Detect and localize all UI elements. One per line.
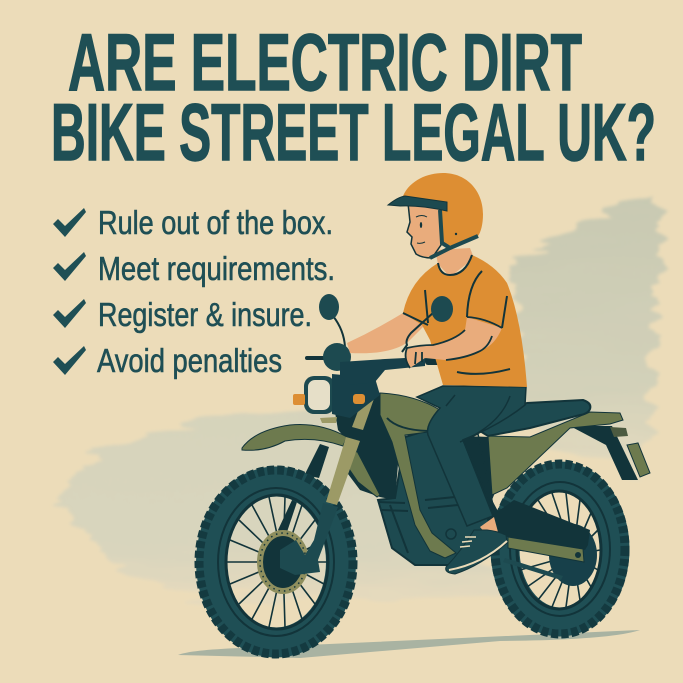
- right mirror: [402, 296, 453, 352]
- front fork lower leg: [280, 503, 338, 575]
- brush wash: upper right: [515, 195, 660, 470]
- check item 3: [53, 296, 312, 333]
- t-shirt: [403, 255, 527, 387]
- check item 4: [53, 342, 282, 379]
- title: [51, 18, 656, 178]
- under-seat shadow: [462, 436, 520, 525]
- ankle: [480, 517, 498, 533]
- handlebar: [305, 343, 446, 385]
- rider: [347, 173, 527, 574]
- front fender: [242, 424, 380, 497]
- check item 2: Meet requirements.: [98, 250, 335, 287]
- trousers: [417, 386, 526, 526]
- engine and battery block: [378, 430, 492, 565]
- helmet: [388, 173, 483, 258]
- check item 4: Avoid penalties: [97, 342, 282, 379]
- left mirror: [319, 294, 345, 347]
- front wheel: [199, 470, 353, 654]
- olive frame and tank: [380, 393, 456, 558]
- head: [407, 203, 441, 258]
- fork upper tubes: [326, 390, 376, 505]
- swingarm: [493, 500, 590, 580]
- rear wheel: [495, 464, 625, 634]
- shoe: [446, 530, 507, 574]
- brake disc: [260, 533, 306, 591]
- check item 1: Rule out of the box.: [98, 204, 333, 241]
- headlight: [293, 374, 380, 423]
- rear tail olive: [488, 412, 623, 495]
- checklist: [53, 204, 335, 379]
- check item 3: Register & insure.: [98, 296, 312, 333]
- rear mudguard and plate: [570, 426, 650, 480]
- motorcycle: [199, 294, 650, 654]
- brush wash: lower left: [60, 400, 520, 600]
- rear fork leg: [278, 444, 329, 535]
- seat: [470, 400, 590, 436]
- far arm: [347, 313, 425, 353]
- ground shadow: [178, 630, 640, 658]
- frame dark section: [335, 392, 400, 500]
- neck: [435, 248, 474, 277]
- near arm: [406, 317, 502, 368]
